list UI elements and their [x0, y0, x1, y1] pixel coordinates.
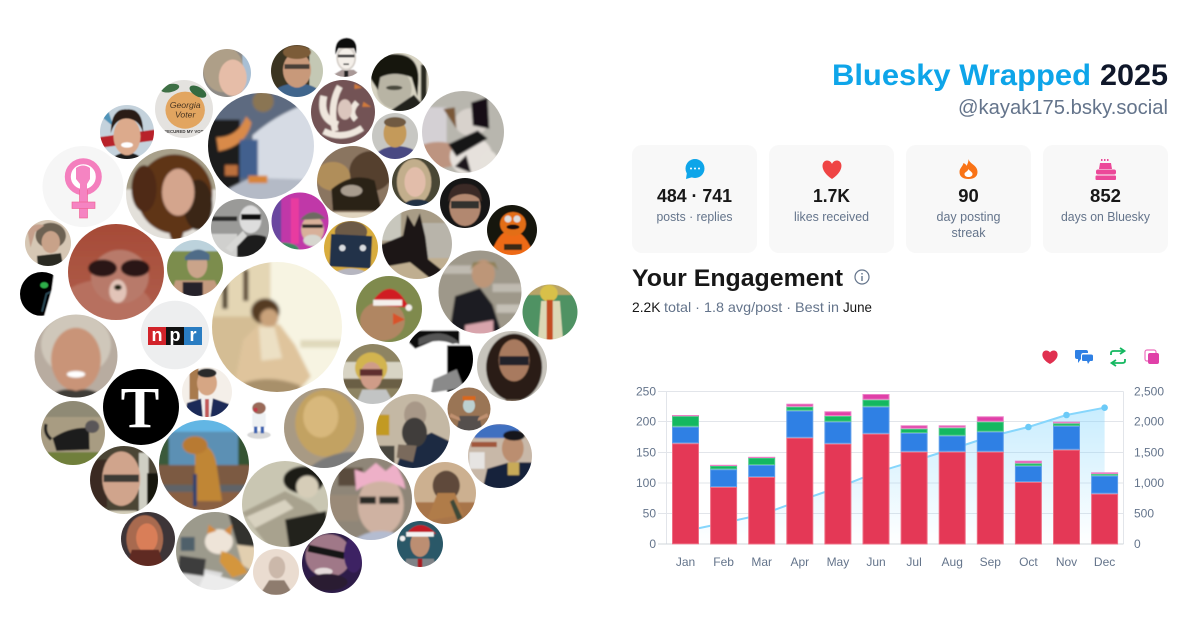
left axis labels — [636, 384, 656, 551]
stat card: posts and replies: 484 · 741 — [657, 186, 732, 206]
month labels: Aug — [942, 555, 963, 569]
avatar: New York Times logo: T — [121, 375, 159, 440]
avatar: NPR logo: p — [170, 325, 180, 345]
month labels: Oct — [1019, 555, 1038, 569]
avatar: woman with curls and glasses — [474, 328, 550, 404]
stat card: day posting streak: 90 — [958, 186, 979, 206]
stat card: day posting streak: day posting — [936, 210, 1001, 224]
stat card: days on Bluesky — [1043, 145, 1168, 253]
engagement summary: 2.2K — [632, 299, 661, 315]
avatar: goose medusa illustration — [311, 80, 375, 144]
stat card: day posting streak: streak — [952, 226, 986, 240]
month labels: Dec — [1094, 555, 1115, 569]
avatar: man in suit — [182, 367, 232, 417]
avatar: woman with hand on head — [25, 220, 71, 266]
avatar: Gritty mascot — [487, 205, 537, 255]
panel: avatar bubble cluster — [18, 35, 580, 597]
avatar: New York Times logo — [103, 369, 179, 445]
avatar: Rachel with flag — [100, 105, 154, 159]
avatar: Georgia Voter sticker: Voter — [175, 110, 196, 120]
avatar: monochrome woman with sunglasses — [211, 199, 269, 257]
avatar: black cat on rocks — [41, 401, 105, 465]
icon: chat bubble — [686, 159, 704, 179]
stacked bars — [672, 394, 1118, 544]
month labels — [676, 555, 1115, 569]
left axis labels: 100 — [636, 476, 656, 490]
avatar: woman holding small dog — [372, 390, 454, 472]
stat card: day posting streak — [906, 145, 1031, 253]
stat card: posts and replies: posts · replies — [656, 210, 732, 224]
avatar: man in purple jacket — [372, 113, 418, 159]
handle: @kayak175.bsky.social — [958, 97, 1168, 119]
icon: info — [855, 270, 869, 284]
heading: your engagement: Your Engagement — [632, 265, 843, 292]
avatar: man in pink scene — [272, 192, 328, 250]
avatar: green painting with tie — [520, 282, 580, 343]
avatar: curly-haired woman — [126, 149, 216, 239]
avatar: calico cat — [422, 91, 504, 173]
icon: quotes legend — [1145, 350, 1159, 364]
avatar: duck close-up — [414, 462, 476, 524]
avatar: envelope mask — [324, 221, 378, 275]
icon: likes legend — [1042, 350, 1058, 364]
right axis labels: 2,500 — [1134, 384, 1164, 398]
avatar: man in navy jacket — [468, 424, 532, 488]
grid and axes — [658, 392, 1124, 544]
avatar: rope and diving suit photo — [208, 93, 314, 199]
avatar: orange cat on newspaper — [176, 512, 254, 590]
avatar: man in santa hat — [397, 521, 443, 567]
left axis labels: 150 — [636, 446, 656, 460]
avatar: NPR logo: r — [189, 325, 197, 345]
avatar: horse and woman — [317, 146, 389, 218]
right axis labels: 2,000 — [1134, 414, 1164, 428]
icon: replies legend — [1075, 350, 1093, 364]
avatar: black cat with green eye — [20, 272, 54, 316]
chart legend icons — [1042, 348, 1159, 366]
right axis labels: 1,500 — [1134, 446, 1164, 460]
avatar: woman with sunglasses outdoors — [340, 341, 406, 407]
month labels: Apr — [790, 555, 809, 569]
avatar: old portrait engraving — [253, 549, 299, 595]
avatar: grey-haired woman smiling — [34, 314, 118, 398]
month labels: Jun — [866, 555, 886, 569]
avatar: newspaper sketch portrait — [334, 37, 358, 77]
cumulative line — [686, 404, 1108, 531]
avatar: black dog on bed — [382, 209, 452, 279]
avatar: high-contrast portrait — [402, 322, 478, 396]
icon: reposts legend — [1111, 348, 1125, 366]
icon: heart — [823, 160, 841, 179]
month labels: Feb — [713, 555, 734, 569]
avatar: golden retriever in park — [159, 420, 249, 510]
left axis labels: 250 — [636, 384, 656, 398]
avatar: bald man with glasses — [90, 446, 158, 514]
avatar: Georgia Voter sticker — [155, 80, 213, 138]
avatar: blonde woman — [203, 49, 251, 97]
avatar: vintage pinup photo — [242, 461, 328, 547]
month labels: Jul — [906, 555, 922, 569]
avatar: vintage child on the beach — [212, 262, 342, 392]
chart: monthly engagement stacked bars with cumulative line — [636, 384, 1164, 569]
avatar: smiling man in purple light — [302, 533, 362, 593]
left axis labels: 200 — [636, 414, 656, 428]
avatar: woman in warm light — [121, 512, 175, 566]
month labels: May — [827, 555, 849, 569]
title: 2025 — [1100, 59, 1168, 92]
stat card: days on Bluesky: 852 — [1090, 186, 1121, 206]
stat card: days on Bluesky: days on Bluesky — [1061, 210, 1151, 224]
left axis labels: 0 — [649, 537, 656, 551]
month labels: Jan — [676, 555, 695, 569]
avatar: blonde woman portrait — [392, 158, 440, 206]
icon: flame — [960, 159, 978, 179]
avatar: older woman on stairs — [434, 246, 530, 338]
icon: birthday cake — [1096, 159, 1116, 180]
cumulative area — [686, 408, 1105, 544]
right axis labels: 500 — [1134, 506, 1154, 520]
month labels: Nov — [1056, 555, 1077, 569]
right axis labels: 0 — [1134, 537, 1141, 551]
avatar: dark-haired man, monochrome — [371, 53, 429, 111]
avatar: santa-hat bird — [353, 273, 425, 345]
avatar: NPR logo: n — [152, 325, 162, 345]
avatar: Georgia Voter sticker: Georgia — [170, 100, 201, 110]
avatar: blonde hair from behind — [280, 384, 368, 472]
title: Bluesky Wrapped — [832, 59, 1091, 92]
avatar: dog in sunglasses — [68, 224, 164, 320]
avatar: NPR logo — [141, 301, 209, 369]
stat card: posts and replies — [632, 145, 757, 253]
engagement summary: total · 1.8 avg/post · Best in — [664, 299, 839, 315]
right axis labels: 1,000 — [1134, 476, 1164, 490]
stat card: likes received: likes received — [794, 210, 869, 224]
month labels: Sep — [980, 555, 1001, 569]
avatar: woman with birthday crown — [330, 458, 412, 540]
avatar: feminist fist symbol — [42, 146, 124, 227]
stat card: likes received: 1.7K — [813, 186, 850, 206]
avatar: Georgia Voter sticker: I SECURED MY VOTE — [162, 129, 206, 134]
stat card: likes received — [769, 145, 894, 253]
left axis labels: 50 — [643, 506, 656, 520]
avatar: person in orange cap and mask — [445, 385, 493, 433]
avatar: woman in cap — [167, 240, 223, 296]
right axis labels — [1134, 384, 1164, 551]
engagement summary: June — [843, 299, 872, 315]
avatar: man with dark glasses — [440, 178, 490, 228]
month labels: Mar — [751, 555, 772, 569]
avatar: man with glasses — [271, 45, 323, 97]
avatar: cartoon doctor figure — [247, 402, 271, 439]
